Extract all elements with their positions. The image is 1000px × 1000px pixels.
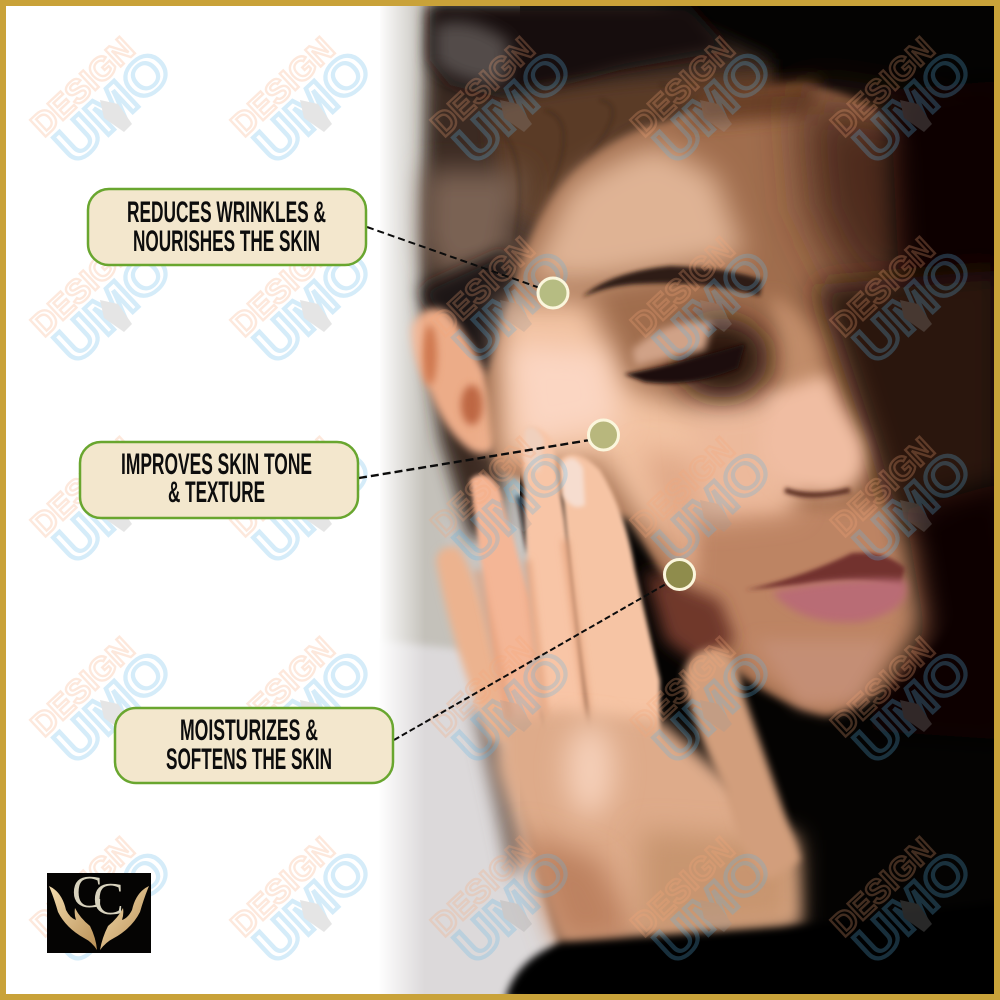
watermark tiles: DESIGN [224,230,341,343]
callout: reduces wrinkles: REDUCES WRINKLES & [127,196,326,229]
watermark tiles: DESIGN [824,30,941,143]
watermark tiles: UMO [843,239,982,374]
logo: CC with hands: C [72,866,103,917]
watermark tiles: DESIGN [824,830,941,943]
watermark tiles: UMO [643,239,782,374]
cheek hollow [645,570,735,665]
watermark tiles: DESIGN [224,630,341,743]
photo: woman touching her cheek [370,0,1000,1000]
watermark tiles: DESIGN [424,630,541,743]
watermark tiles: UMO [43,439,182,574]
lower cheek [642,447,706,590]
callout: moisturizes [115,708,393,783]
watermark tiles: UMO [643,839,782,974]
photo backdrop [370,0,1000,1000]
right side shade beside nose [815,270,1000,530]
connector: skin tone callout to cheek dot [359,440,590,478]
ear [410,308,505,454]
watermark tiles: UMO [843,439,982,574]
watermark tiles: UMO [443,639,582,774]
watermark tiles: DESIGN [424,230,541,343]
callout: moisturizes: SOFTENS THE SKIN [166,743,332,776]
callout: improves skin tone: & TEXTURE [168,476,265,509]
callout: reduces wrinkles [88,189,366,265]
lower face [695,505,925,712]
marker dot: cheek [588,420,618,450]
watermark tiles: UMO [443,439,582,574]
watermark tiles: DESIGN [24,30,141,143]
finger separators [478,540,590,730]
watermark tiles: UMO [243,439,382,574]
callout: reduces wrinkles: NOURISHES THE SKIN [133,225,320,258]
callout: improves skin tone [80,442,358,518]
nose tip [760,375,865,495]
watermark tiles: DESIGN [224,830,341,943]
cheek beside nose [690,395,795,520]
watermark tiles: UMO [243,39,382,174]
dark foreground bottom [500,920,817,994]
callout: moisturizes: MOISTURIZES & [180,714,318,747]
watermark tiles: UMO [443,39,582,174]
watermark tiles: DESIGN [424,430,541,543]
pinky [436,547,515,740]
eyebrow [582,266,762,297]
hand [436,427,800,945]
watermark tiles: UMO [243,239,382,374]
watermark tiles: DESIGN [624,30,741,143]
lips [745,553,907,622]
logo: CC with hands [47,866,151,953]
bright cheek [500,300,785,560]
connector: moisturizes callout to lower cheek dot [394,584,666,740]
eye socket shadow [624,318,768,398]
connector: wrinkles callout to temple dot [367,227,540,288]
palm [498,710,800,945]
watermark tiles: UMO [643,639,782,774]
watermark tiles: UMO [843,839,982,974]
nose bridge [767,296,832,389]
watermark tiles: UMO [43,39,182,174]
watermark tiles: DESIGN [624,230,741,343]
fingernails [562,458,585,507]
watermark tiles: DESIGN [624,630,741,743]
watermark tiles: DESIGN [624,430,741,543]
watermark tiles: DESIGN [424,830,541,943]
watermark tiles: DESIGN [24,830,141,943]
marker dot: temple [538,278,568,308]
watermark tiles: DESIGN [824,430,941,543]
watermark tiles: DESIGN [824,230,941,343]
watermark tiles: DESIGN [224,430,341,543]
watermark tiles: DESIGN [424,30,541,143]
face [485,80,1000,740]
watermark tiles: UMO [43,839,182,974]
watermark tiles: UMO [643,39,782,174]
watermark tiles: DESIGN [224,30,341,143]
watermark tiles: UMO [443,839,582,974]
watermark tiles: UMO [43,639,182,774]
thumb [683,648,800,880]
index finger [560,454,660,770]
ring finger [470,474,545,740]
watermark tiles: DESIGN [24,230,141,343]
callout: improves skin tone: IMPROVES SKIN TONE [121,448,312,481]
middle finger [522,427,590,740]
watermark tiles: UMO [443,239,582,374]
watermark tiles: UMO [843,39,982,174]
watermark tiles: DESIGN [24,430,141,543]
watermark tiles: UMO [843,639,982,774]
watermark tiles: UMO [43,239,182,374]
forehead shading [525,145,745,282]
hair strands [500,85,678,240]
watermark tiles: DESIGN [824,630,941,743]
watermark tiles: UMO [643,439,782,574]
watermark tiles: DESIGN [24,630,141,743]
gap between fingers [516,495,528,555]
white fade over photo edge [340,0,425,1000]
watermark tiles: UMO [243,839,382,974]
watermark tiles: DESIGN [624,830,741,943]
watermark tiles: UMO [243,639,382,774]
logo: CC with hands: C [93,873,124,924]
marker dot: lower cheek [664,560,694,590]
hair [418,5,770,540]
